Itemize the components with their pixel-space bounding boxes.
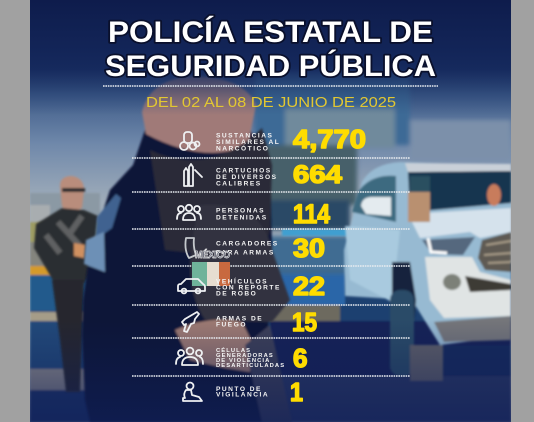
row: celulas: 6	[293, 343, 307, 373]
row: cargadores	[185, 233, 325, 263]
main officer	[82, 76, 292, 422]
row: personas: DETENIDAS	[216, 214, 268, 222]
row: cartuchos: 664	[293, 161, 342, 189]
row: sustancias: SUSTANCIAS	[216, 132, 273, 140]
POLICIA ESTATAL lettering on back	[95, 194, 121, 240]
cyan stripe on parked car	[282, 229, 350, 236]
row: sustancias: 4,770	[293, 124, 366, 154]
row: personas: PERSONAS	[216, 208, 265, 214]
row: cartuchos: DE DIVERSOS	[216, 174, 278, 181]
shoulder patch	[192, 262, 230, 286]
row: armas de fuego: 15	[292, 307, 317, 337]
row: celulas: DE VIOLENCIA	[216, 358, 270, 364]
row: personas: 114	[293, 199, 330, 229]
row: punto de vigilancia: 1	[290, 377, 303, 407]
row: sustancias: NARCÓTICO	[216, 144, 269, 152]
row: armas de fuego: FUEGO	[216, 322, 247, 328]
row: personas	[177, 199, 330, 229]
dark top overlay	[30, 57, 511, 112]
icon: narcotic substances	[180, 132, 200, 150]
row: punto de vigilancia: PUNTO DE	[216, 386, 262, 393]
row: cartuchos: CALIBRES	[216, 180, 262, 188]
ground and road	[30, 193, 511, 422]
row: cargadores: 30	[293, 233, 325, 263]
title	[105, 15, 436, 83]
icon: revolver	[182, 312, 199, 332]
row: cargadores: CARGADORES	[216, 240, 279, 248]
row: punto de vigilancia	[183, 377, 303, 407]
row: sustancias	[180, 124, 366, 154]
row: cartuchos	[184, 161, 342, 189]
icon: magazines	[185, 238, 196, 258]
date subtitle: DEL 02 AL 08 DE JUNIO DE 2025	[146, 94, 396, 111]
dark bottom overlay	[30, 320, 511, 422]
row: cargadores: PARA ARMAS	[216, 250, 275, 256]
icon: cartridges	[184, 164, 202, 186]
row: celulas	[176, 343, 307, 373]
row: celulas: DESARTICULADAS	[216, 363, 285, 369]
icon: car	[178, 279, 205, 293]
pickup truck	[344, 162, 511, 381]
row: vehiculos	[178, 271, 325, 301]
row: vehiculos: DE ROBO	[216, 290, 257, 298]
row: armas de fuego: ARMAS DE	[216, 316, 263, 322]
row: vehiculos: VEHÍCULOS	[216, 276, 268, 286]
row: vehiculos: CON REPORTE	[216, 284, 281, 292]
icon: cells of people	[176, 348, 203, 365]
row: armas de fuego	[182, 307, 317, 337]
row: cartuchos: CARTUCHOS	[216, 168, 272, 174]
row: vehiculos: 22	[293, 271, 325, 301]
icon: surveillance point	[183, 382, 202, 401]
officer in background	[34, 176, 98, 392]
icon: detained people	[177, 205, 201, 220]
background vehicle	[255, 70, 511, 274]
title: SEGURIDAD PÚBLICA	[105, 49, 436, 83]
patch lettering: MÉXICO	[195, 248, 230, 261]
row: punto de vigilancia: VIGILANCIA	[216, 392, 269, 398]
title: POLICÍA ESTATAL DE	[108, 15, 433, 49]
row: celulas: GENERADORAS	[216, 353, 274, 359]
row: sustancias: SIMILARES AL	[216, 139, 280, 146]
row: celulas: CÉLULAS	[216, 346, 251, 354]
